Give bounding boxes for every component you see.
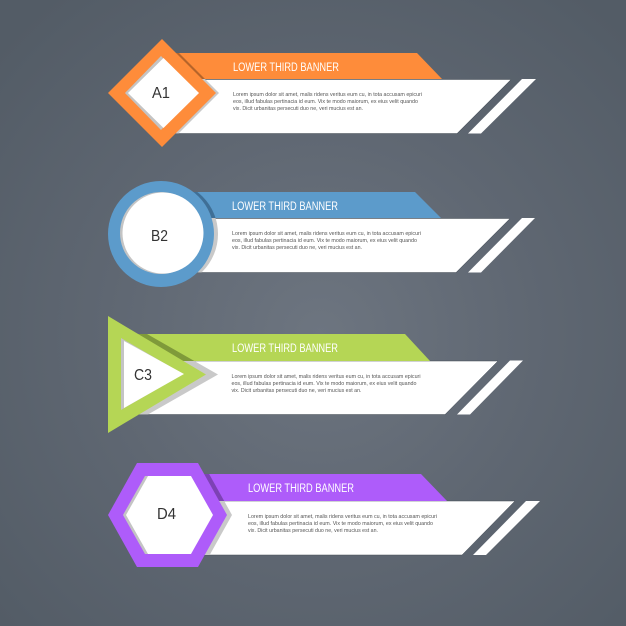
white panel C (136, 361, 498, 414)
infographic (108, 39, 540, 567)
hexagon shadow D (204, 474, 232, 555)
title A: LOWER THIRD BANNER (233, 62, 339, 74)
triangle C (108, 316, 206, 433)
body text C: Lorem ipsum dolor sit amet, malis ridens veritus eum cu, in tota accusam epicuri (232, 374, 420, 380)
triangle shadow C (138, 334, 218, 414)
body text A: eos, illud fabulas pertinacia id eum. Vix te modo maiorum, ex eius velit quando (233, 99, 418, 105)
header C (130, 334, 430, 361)
body text D: Lorem ipsum dolor sit amet, malis ridens veritus eum cu, in tota accusam epicuri (248, 514, 437, 520)
label A1: A1 (152, 85, 170, 102)
stripe A (468, 79, 536, 134)
hexagon D (108, 463, 227, 567)
banner C (108, 316, 523, 433)
title D: LOWER THIRD BANNER (248, 483, 354, 495)
stripe C (457, 360, 523, 414)
label C3: C3 (134, 367, 152, 384)
white panel A (175, 80, 511, 134)
body text C (232, 374, 420, 394)
label B2: B2 (151, 228, 168, 245)
body text D: eos, illud fabulas pertinacia id eum. Vix te modo maiorum, ex eius velit quando (248, 521, 433, 527)
body text B: eos, illud fabulas pertinacia id eum. Vix te modo maiorum, ex eius velit quando (232, 238, 417, 244)
title B: LOWER THIRD BANNER (232, 201, 338, 213)
circle B (108, 181, 214, 287)
hexagon inner D (126, 476, 213, 554)
diamond shadow A (176, 53, 219, 134)
banner A (108, 39, 536, 147)
diamond inner A (128, 58, 199, 128)
body text A: Lorem ipsum dolor sit amet, malis ridens veritus eum cu, in tota accusam epicuri (233, 92, 422, 98)
circle inner shadow B (120, 192, 202, 274)
body text C: vix. Dicit urbanitas persecuti duo ne, veri mucius est an. (232, 388, 362, 394)
stripe B (468, 218, 535, 272)
header B (170, 192, 441, 218)
banner D (108, 463, 540, 567)
body text B: Lorem ipsum dolor sit amet, malis ridens veritus eum cu, in tota accusam epicuri (232, 231, 421, 237)
diamond inner shadow A (125, 56, 197, 130)
body text A: vix. Dicit urbanitas persecuti duo ne, veri mucius est an. (233, 106, 363, 112)
body text B (232, 231, 421, 251)
title C: LOWER THIRD BANNER (232, 343, 338, 355)
white panel B (175, 218, 510, 272)
diamond A (108, 39, 216, 147)
body text D: vix. Dicit urbanitas persecuti duo ne, veri mucius est an. (248, 528, 378, 534)
circle shadow B (194, 192, 218, 272)
label D4: D4 (157, 506, 176, 523)
header A (170, 53, 442, 79)
body text C: eos, illud fabulas pertinacia id eum. Vix te modo maiorum, ex eius velit quando (232, 381, 416, 387)
body text B: vix. Dicit urbanitas persecuti duo ne, veri mucius est an. (232, 245, 362, 251)
white panel D (195, 501, 515, 555)
body text D (248, 514, 437, 534)
triangle inner shadow C (121, 338, 183, 410)
triangle inner C (124, 341, 184, 408)
body text A (233, 92, 422, 112)
banner B (108, 181, 535, 287)
stripe D (473, 501, 540, 555)
circle inner B (122, 192, 204, 274)
header D (190, 474, 447, 501)
hexagon inner shadow D (123, 476, 210, 554)
